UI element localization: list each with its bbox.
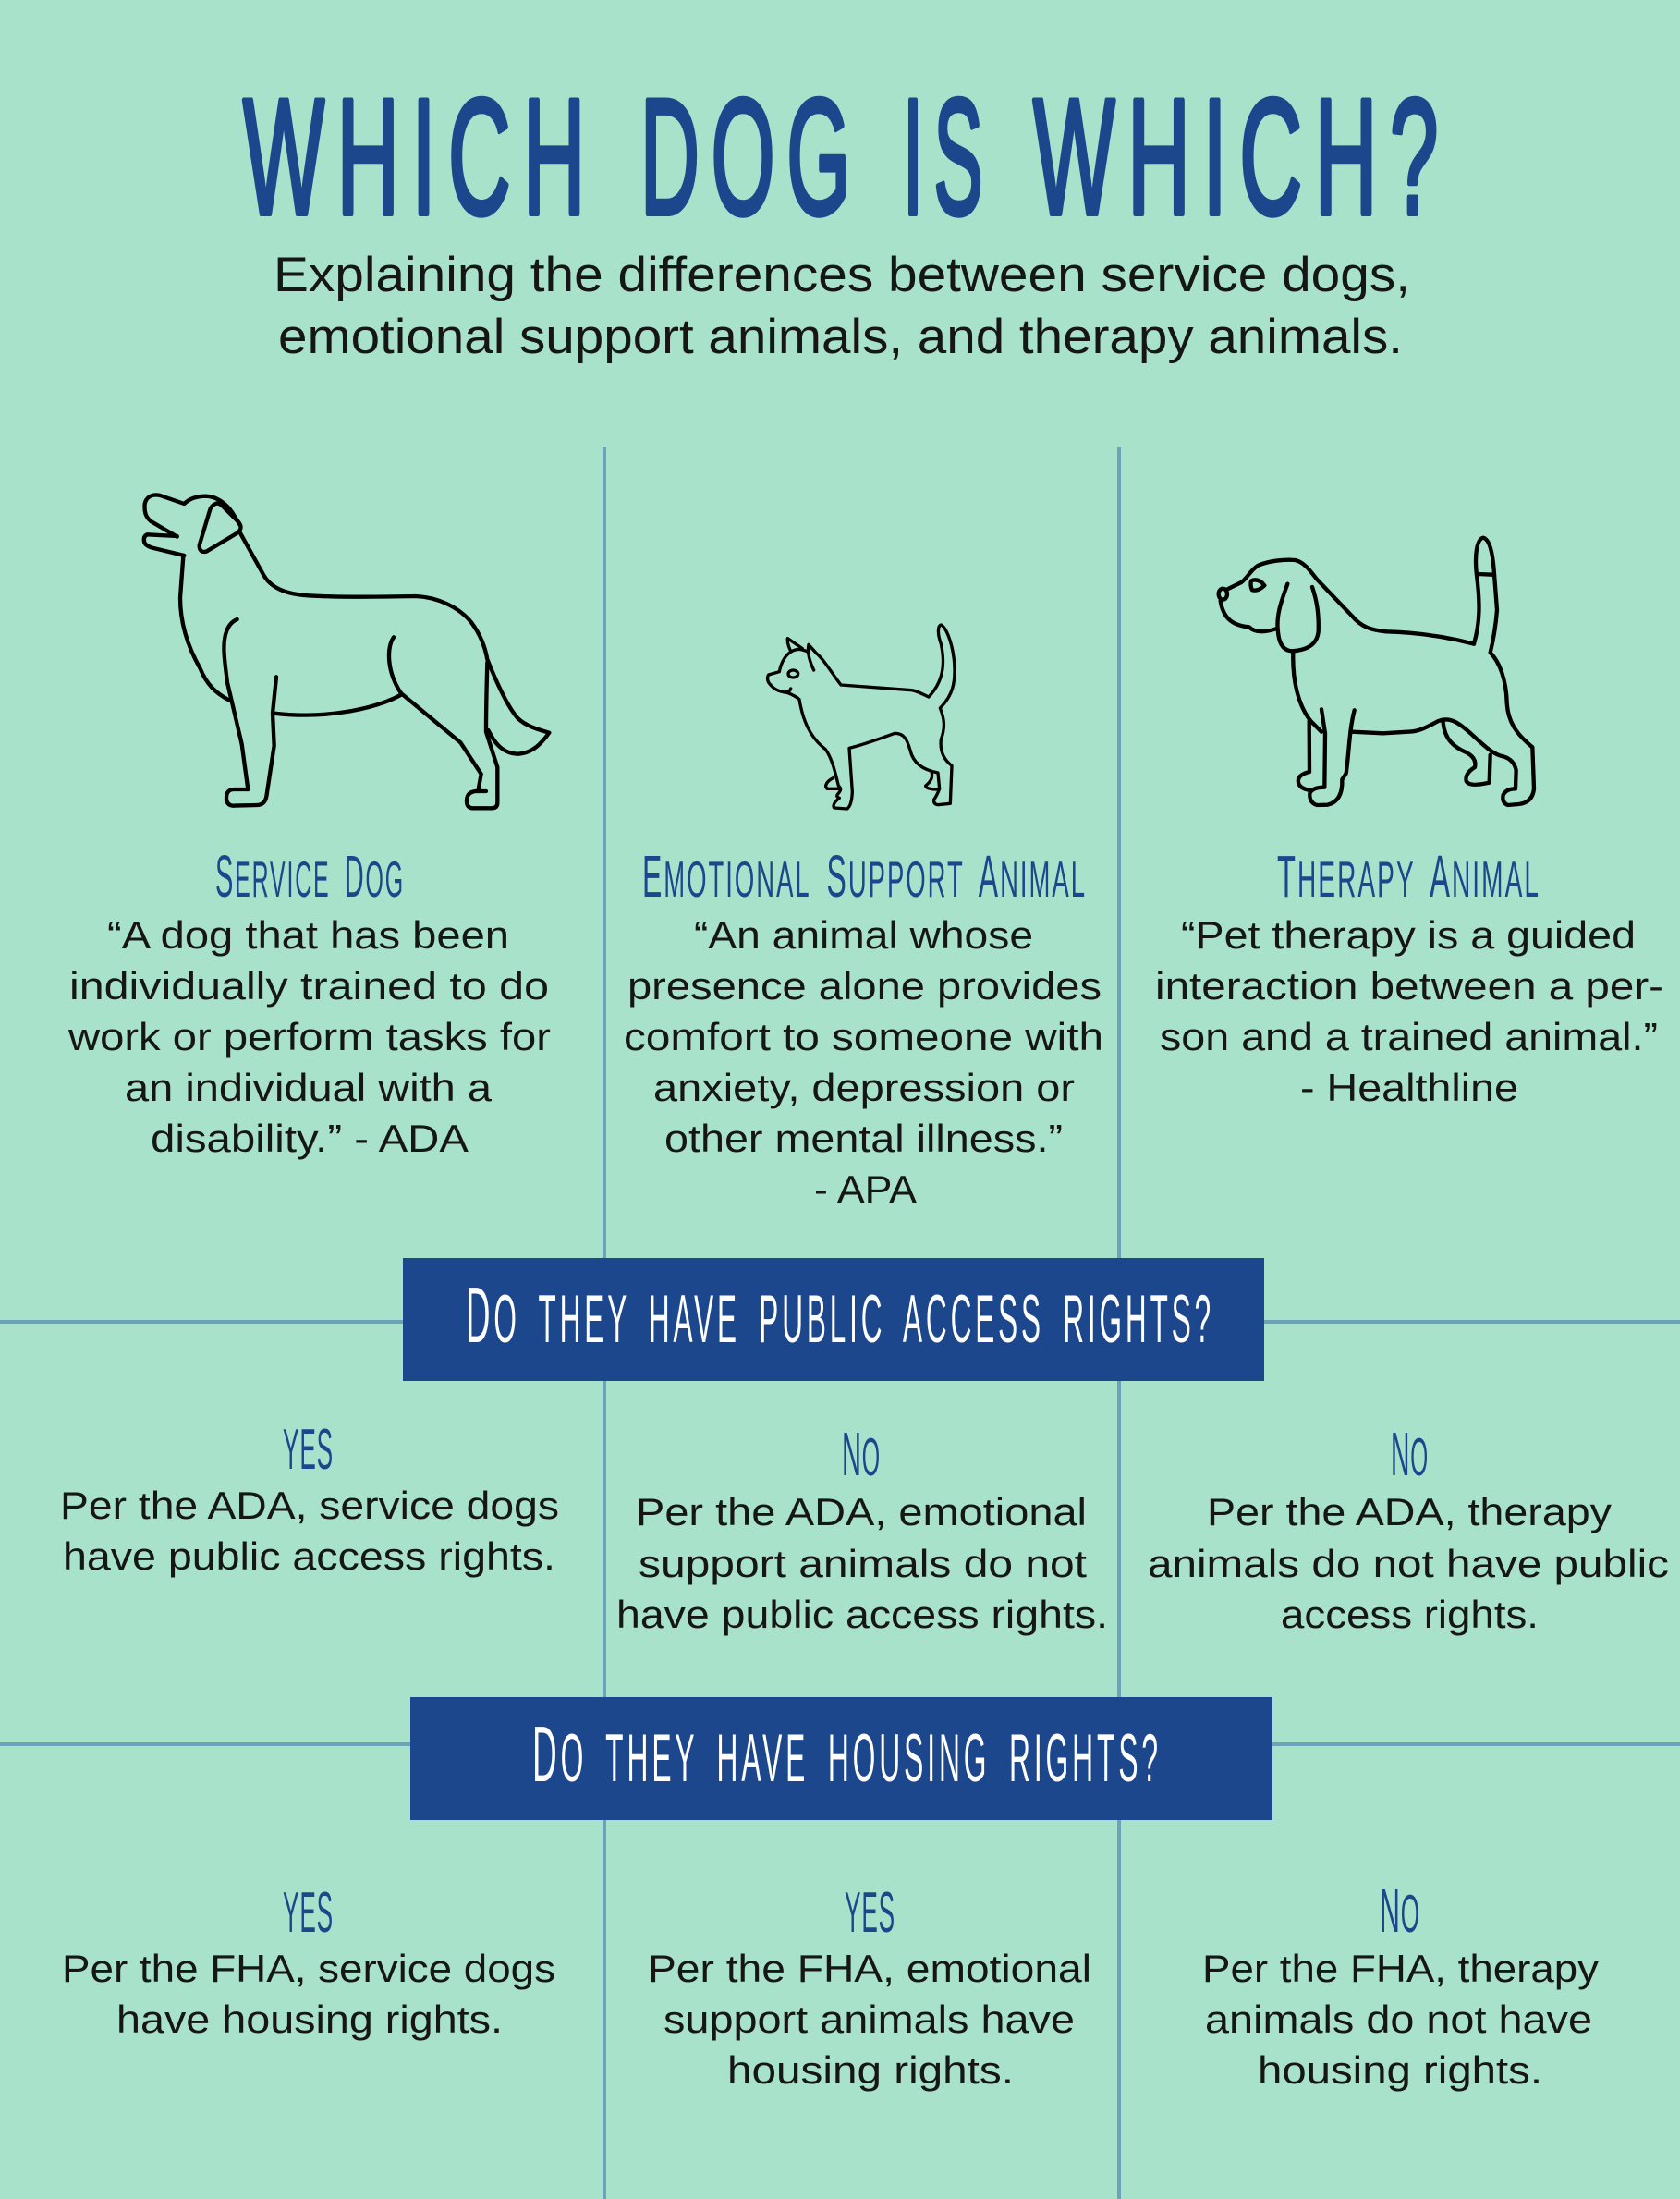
answer: service dog housing [62,1881,555,2041]
definition: emotional support animal: - APA [814,1167,917,1211]
answer: emotional support animal public access: Per the ADA, emotional [636,1490,1087,1533]
answer: therapy animal public access: NO [1391,1420,1429,1489]
definition: therapy animal: “Pet therapy is a guided [1181,913,1636,957]
answer: therapy animal housing: animals do not have [1205,1997,1592,2041]
answer: therapy animal housing: housing rights. [1258,2048,1542,2092]
definition: service dog: “A dog that has been [107,913,509,957]
definition: service dog: individually trained to do [69,964,549,1008]
definition: emotional support animal: “An animal whose [694,913,1033,957]
answer: therapy animal housing [1202,1876,1599,2092]
answer: emotional support animal public access: have public access rights. [616,1593,1108,1636]
answer: emotional support animal housing: housing rights. [727,2048,1014,2092]
heading: emotional support animal: EMOTIONAL SUPPORT ANIMAL [642,843,1087,910]
answer: therapy animal public access [1148,1420,1669,1636]
answer: emotional support animal housing: YES [845,1881,895,1945]
banner: housing rights [410,1697,1272,1820]
definition: emotional support animal: comfort to someone with [624,1015,1103,1058]
panel: emotional support animal [624,625,1103,1211]
title: IS [903,65,993,249]
answer: emotional support animal public access: support animals do not [639,1542,1087,1585]
answer: service dog public access [60,1418,559,1578]
answer: therapy animal public access: access rights. [1281,1593,1539,1636]
answer: therapy animal housing: Per the FHA, therapy [1202,1947,1599,1990]
definition: therapy animal [1155,913,1663,1109]
definition: service dog [67,913,551,1160]
icon: beagle [1219,538,1534,805]
panel: service dog [67,495,551,1160]
definition: service dog: work or perform tasks for [67,1015,551,1058]
definition: therapy animal: interaction between a per- [1155,964,1663,1008]
answer: therapy animal public access: Per the ADA, therapy [1207,1490,1612,1533]
answer: emotional support animal housing: Per the FHA, emotional [648,1947,1091,1990]
definition: therapy animal: - Healthline [1300,1066,1518,1109]
title: DOG [640,65,862,249]
panel: therapy animal [1155,538,1663,1109]
answer: emotional support animal public access: NO [842,1420,881,1489]
answer: service dog housing: YES [283,1881,334,1945]
heading: service dog: SERVICE DOG [215,843,405,910]
answer: service dog public access: Per the ADA, service dogs [60,1484,559,1527]
definition: emotional support animal: presence alone provides [627,964,1102,1008]
heading: therapy animal: THERAPY ANIMAL [1277,843,1540,910]
answer: service dog public access: have public access rights. [63,1534,555,1578]
answer: therapy animal housing: NO [1380,1876,1420,1946]
definition: service dog: disability.” - ADA [151,1117,469,1160]
answer: emotional support animal housing [648,1881,1091,2092]
title [243,65,1451,249]
subtitle: Explaining the differences between service dogs, [274,248,1410,302]
answer: emotional support animal public access [616,1420,1108,1636]
answer: service dog public access: YES [283,1418,334,1482]
answer: service dog housing: Per the FHA, service dogs [62,1947,555,1990]
answer: therapy animal public access: animals do not have public [1148,1542,1669,1585]
title: WHICH [243,65,598,249]
banner: public access rights [403,1258,1264,1381]
definition: service dog: an individual with a [125,1066,493,1109]
definition: emotional support animal [624,913,1103,1211]
icon: service dog [144,495,549,808]
definition: emotional support animal: anxiety, depression or [653,1066,1075,1109]
definition: emotional support animal: other mental illness.” [664,1117,1063,1160]
answer: emotional support animal housing: support animals have [663,1997,1075,2041]
subtitle [274,248,1410,364]
subtitle: emotional support animals, and therapy animals. [278,310,1403,364]
definition: therapy animal: son and a trained animal.” [1160,1015,1658,1058]
icon: chihuahua [767,625,955,809]
answer: service dog housing: have housing rights. [116,1997,503,2041]
